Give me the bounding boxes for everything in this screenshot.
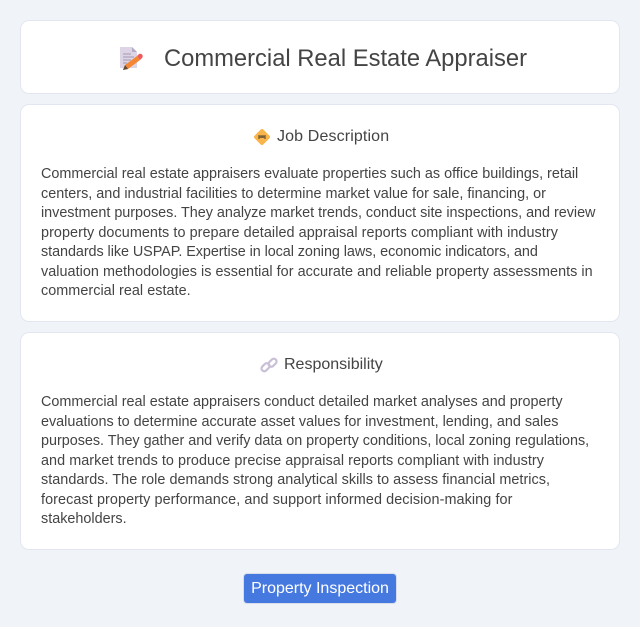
- button: property inspection: Property Inspection: [251, 580, 389, 597]
- text block: job description: centers, and industrial facilities to determine market value for sale, financing, or: [41, 186, 546, 202]
- text block: responsibility: standards. The role demands strong analytical skills to assess financial metrics,: [41, 472, 550, 488]
- text block: job description: property documents to prepare detailed appraisal reports compliant with industry: [41, 224, 558, 240]
- text block: responsibility: purposes. They gather and verify data on property conditions, local zoning regulations,: [41, 433, 589, 449]
- icon: road sign diamond: [254, 129, 270, 145]
- text block: job description: commercial real estate.: [41, 283, 191, 299]
- text block: job description: [41, 166, 596, 299]
- panel: title: [20, 20, 620, 94]
- icon: document with pencil: [120, 47, 143, 70]
- panel: job description: [20, 104, 620, 322]
- text block: responsibility: Commercial real estate appraisers conduct detailed market analyses and property: [41, 394, 563, 410]
- heading: job description: Job Description: [277, 128, 389, 145]
- text block: responsibility: evaluations to determine accurate asset values for investment, lending, and sales: [41, 414, 558, 430]
- title text: Commercial Real Estate Appraiser: [164, 45, 527, 72]
- text block: job description: investment purposes. They analyze market trends, conduct site inspections, and review: [41, 205, 595, 221]
- text block: job description: standards like USPAP. Expertise in local zoning laws, economic indicators, and: [41, 244, 538, 260]
- heading: responsibility: Responsibility: [284, 356, 383, 373]
- icon: chain link: [260, 358, 278, 372]
- text block: responsibility: forecast property performance, and support informed decision-making for: [41, 492, 512, 508]
- text block: responsibility: stakeholders.: [41, 511, 127, 527]
- text block: job description: valuation methodologies is essential for accurate and reliable property assessments in: [41, 264, 593, 280]
- button: property inspection: [244, 574, 396, 603]
- text block: job description: Commercial real estate appraisers evaluate properties such as office buildings, retail: [41, 166, 578, 182]
- text block: responsibility: and market trends to produce precise appraisal reports compliant with industry: [41, 452, 544, 468]
- text block: responsibility: [41, 394, 589, 527]
- panel: responsibility: [20, 332, 620, 550]
